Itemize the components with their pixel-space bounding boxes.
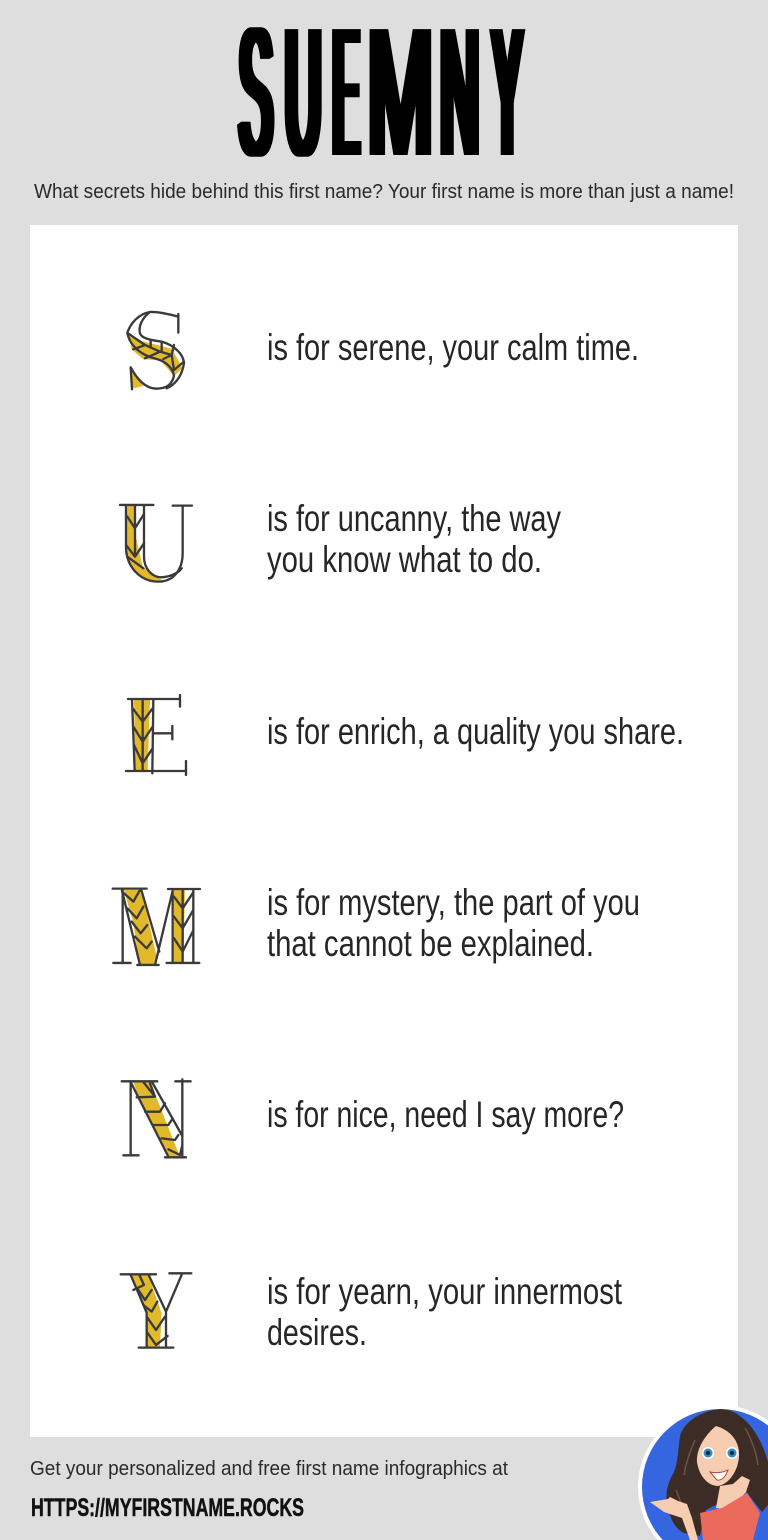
text: M line 2: that cannot be explained. (267, 923, 594, 964)
footer url: HTTPS://MYFIRSTNAME.ROCKS (31, 1494, 304, 1522)
icon: letter E (126, 695, 186, 775)
subtitle: What secrets hide behind this first name? Your first name is more than just a name! (34, 181, 734, 203)
text: Y line 1: is for yearn, your innermost (267, 1271, 623, 1312)
text: Y line 2: desires. (267, 1312, 367, 1353)
title (239, 0, 522, 195)
text: U line 1: is for uncanny, the way (267, 498, 561, 539)
text: S line: is for serene, your calm time. (267, 327, 639, 368)
text: U line 2: you know what to do. (267, 539, 542, 580)
icon: letter M (113, 889, 200, 965)
icon: letter Y (121, 1273, 191, 1348)
icon: letter U (120, 505, 192, 582)
icon: letter S (127, 312, 184, 389)
panel: letters (30, 225, 738, 1437)
icon: avatar (638, 1405, 768, 1540)
footer text: Get your personalized and free first name infographics at (30, 1458, 508, 1480)
text: N line: is for nice, need I say more? (267, 1094, 624, 1135)
text: M line 1: is for mystery, the part of you (267, 882, 640, 923)
icon: letter N (122, 1079, 191, 1157)
